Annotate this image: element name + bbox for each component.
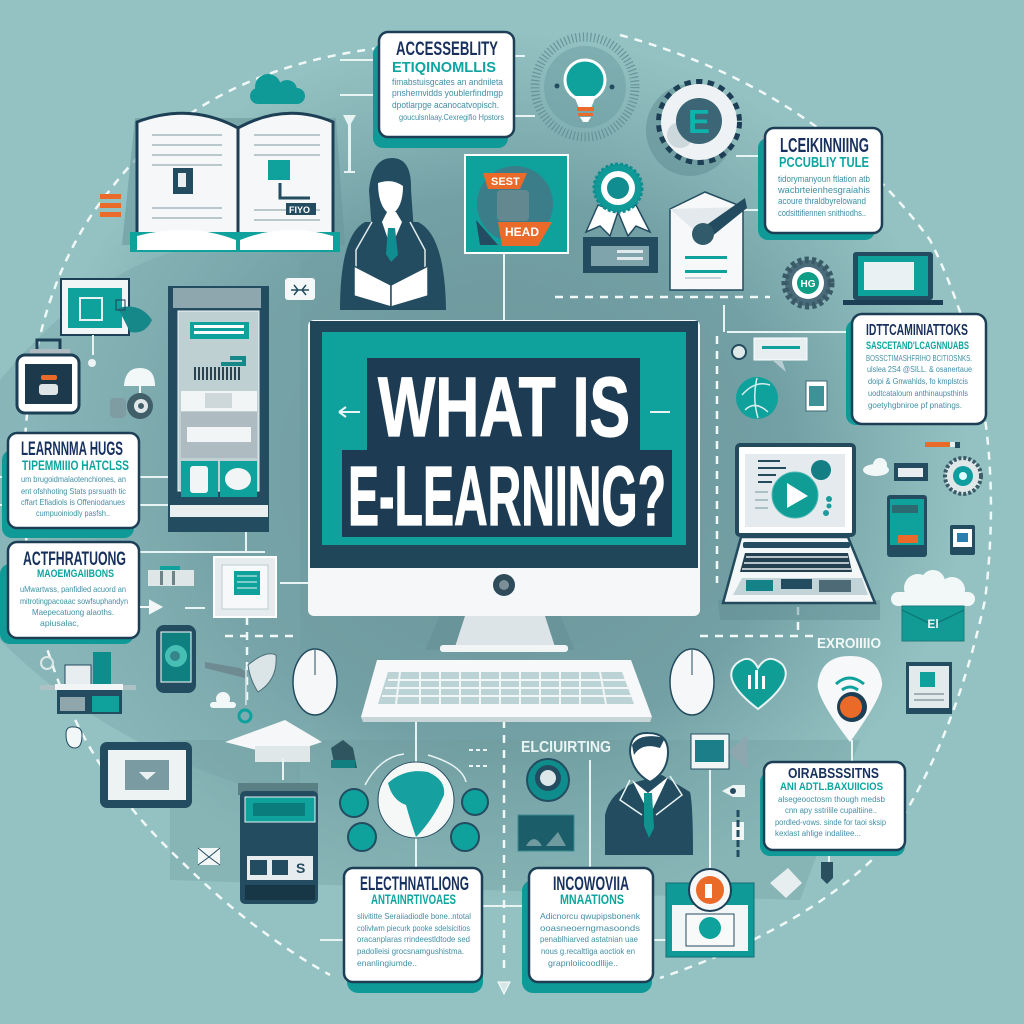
icon: gear E	[646, 84, 737, 176]
icon: location pin wifi	[818, 656, 882, 742]
icon: document with pin	[670, 192, 747, 290]
panel: intercommunications: uodtcataloum anthinaupsthinls	[868, 389, 968, 398]
panel: learning: LCEIKINNIING	[780, 135, 869, 157]
panel: accessibility: fimabstuisgcates an andnileta	[392, 77, 503, 87]
panel: incovmia nations: INCOWOVIIA	[553, 874, 629, 895]
label: earning: EXROIIIIO	[817, 635, 881, 652]
panel: learning: wacbrteienhesgraiahis	[777, 185, 871, 195]
panel: observations: kexlast ahlige indalitee...	[775, 829, 861, 838]
panel: incovmia nations: grapnloiicoodllije..	[548, 958, 618, 968]
panel: learning: PCCUBLIY TULE	[779, 154, 869, 171]
connector lines	[0, 56, 852, 975]
title: WHAT IS	[378, 360, 630, 454]
panel: electhnatling: padolleisi grocsnamgushistma.	[357, 946, 464, 956]
panel: read badge: HEAD	[505, 225, 539, 239]
icon: small square button	[285, 278, 315, 300]
panel: activating	[0, 542, 139, 644]
icon: arrow	[140, 601, 161, 613]
panel: accessibility: pnshemvidds youblerfindmgp	[392, 88, 503, 98]
panel: activating: apiusalac,	[40, 618, 79, 628]
panel: learning	[758, 128, 882, 240]
panel: intercommunications	[846, 314, 986, 425]
icon: dark tag	[821, 862, 833, 884]
icon: chart card	[518, 815, 574, 851]
icon: big cloud	[891, 570, 975, 606]
figure: businessman	[605, 733, 693, 855]
icon: white bubble	[66, 727, 82, 748]
panel: electhnatling: colivlwm piecurk pooke sdelsicitios	[357, 923, 470, 933]
panel: learning hubs: um brugoidmalaotenchiones, an	[21, 474, 126, 484]
panel: accessibility: gouculsnlaay.Cexregifio Hpstors	[399, 112, 504, 122]
icon: small teal gear	[945, 458, 981, 494]
panel: activating: Maepecatuong alaoths.	[32, 607, 114, 617]
icon: open book	[122, 113, 345, 252]
icon: orange list	[100, 194, 121, 217]
icon: laptop with play	[718, 445, 880, 620]
icon: id card	[906, 662, 952, 714]
panel: electhnatling: slivititte Seraiiadiodle bone..ntotal	[357, 911, 471, 921]
icon: cap	[225, 720, 322, 780]
icon: envelope small	[198, 848, 220, 865]
panel: intercommunications: ulslea 2S4 @SILL. & osanertaue	[867, 365, 972, 374]
panel: learning: acoure thraldbyrelowand	[778, 196, 866, 206]
panel: learning hubs: cffart Efiadiols is Offeniodanues	[21, 497, 125, 507]
panel: incovmia nations	[522, 868, 653, 993]
panel: electhnatling: ANTAINRTIVOAES	[371, 891, 456, 907]
panel: electhnatling: ELECTHNATLIONG	[360, 874, 469, 895]
icon: light bulb	[535, 37, 635, 137]
icon: tablet	[887, 495, 927, 557]
panel: learning hubs: TIPEMMIIIO HATCLSS	[22, 457, 129, 473]
icon: small phone	[806, 381, 827, 411]
icon: umbrella and camera	[110, 368, 155, 419]
icon: dark gear HG	[785, 260, 831, 306]
icon: document card	[214, 557, 276, 617]
panel: intercommunications: SASCETAND'LCAGNNUABS	[866, 340, 969, 352]
icon: video card	[100, 742, 192, 808]
icon: lamp stem	[343, 115, 356, 172]
icon: right mouse	[670, 649, 714, 715]
icon: arrow marker	[498, 982, 510, 994]
icon: pencil badge	[732, 345, 746, 359]
icon: small bag dark	[331, 740, 357, 768]
icon: desk with books	[40, 652, 136, 714]
panel: incovmia nations: ooasneoerngmasoonds	[540, 923, 640, 933]
panel: observations: alsegeooctosm though medsb	[778, 795, 886, 804]
icon: dashes grid	[469, 750, 490, 766]
icon: teal envelope	[902, 606, 964, 641]
icon: card reader machine	[238, 783, 318, 904]
panel: learning hubs	[2, 433, 139, 538]
panel: intercommunications: doipi & Gnwahlds, fo kmplstcis	[868, 377, 968, 386]
panel: electhnatling: oracanplaras rrindeestldtode sed	[357, 934, 470, 944]
icon: small server	[148, 566, 194, 586]
icon: stethoscope tool	[205, 654, 276, 722]
panel: electhnatling: enanlingiumde..	[357, 958, 417, 968]
panel: observations: cnn apy sstrilile cupaltiine..	[785, 806, 877, 815]
panel: learning hubs: cumpuoiniodly pasfsh..	[36, 508, 110, 518]
title: E-LEARNING?	[348, 449, 666, 543]
icon: briefcase	[17, 340, 79, 413]
panel: incovmia nations: Adicnorcu qwupipsbonenk	[540, 911, 641, 921]
icon: left mouse	[293, 649, 337, 715]
icon: orange bar	[925, 442, 960, 448]
panel: incovmia nations: nous g.recalttiga aoctiok en	[541, 946, 635, 956]
panel: activating: MAOEMGAIIBONS	[37, 568, 114, 580]
icon: pill tube	[732, 810, 744, 860]
panel: learning hubs: ent ofshhoting Stats psrsuath tic	[21, 486, 127, 496]
icon: teal record dial	[527, 759, 569, 801]
panel: intercommunications: BOSSCTIMASHFRIHO BCITIOSNKS.	[866, 354, 972, 363]
icon: small clouds	[863, 458, 928, 481]
icon: teal envelope: El	[927, 617, 939, 631]
figure: woman reading	[340, 158, 446, 310]
panel: incovmia nations: penablhiarved astatnian uae	[540, 934, 638, 944]
panel: accessibility: ACCESSEBLITY	[396, 39, 498, 60]
monitor	[308, 320, 700, 652]
panel: activating: mitrotingpacoaac sowfsuphandyn	[20, 596, 128, 606]
panel: observations: ANI ADTL.BAXUIICIOS	[780, 781, 883, 793]
icon: folded paper	[770, 868, 802, 898]
panel: learning: tidorymanyoun ftlation atb	[778, 174, 870, 184]
icon: small cloud left	[210, 692, 236, 708]
label: elcourting: ELCIUIRTING	[521, 739, 611, 756]
icon: keyboard	[361, 660, 652, 722]
icon: gear E: E	[688, 103, 710, 140]
panel: learning hubs: LEARNNMA HUGS	[21, 439, 123, 460]
panel: activating: uMwartwss, panfidled acuord an	[20, 584, 126, 594]
panel: accessibility: ETIQINOMLLIS	[392, 59, 496, 76]
panel: read badge: SEST	[491, 176, 520, 188]
panel: incovmia nations: MNAATIONS	[560, 891, 624, 907]
icon: open book: FIYO	[289, 205, 310, 215]
icon: card reader machine: S	[296, 860, 305, 876]
panel: observations: pordled-vows. sinde for taoi sksip	[775, 818, 887, 827]
icon: small phone right	[950, 525, 975, 555]
icon: world globe	[340, 754, 488, 851]
panel: accessibility	[373, 32, 514, 148]
icon: small presentation screen	[583, 237, 658, 273]
icon: cloud	[250, 74, 305, 104]
panel: learning: codsittifiennen snithiodhs..	[778, 208, 866, 218]
panel: accessibility: dpotlarpge acanocatvopisch.	[392, 100, 499, 110]
icon: tablet with tool	[61, 279, 152, 367]
icon: speech bubble	[754, 338, 807, 372]
icon: ribbon badge	[586, 164, 650, 236]
icon: projector	[691, 734, 747, 769]
panel: electhnatling	[344, 868, 483, 993]
panel: intercommunications: IDTTCAMINIATTOKS	[866, 322, 968, 339]
icon: rocket	[722, 785, 745, 797]
panel: observations: OIRABSSSITNS	[788, 765, 879, 782]
panel: central phone	[168, 286, 269, 532]
icon: heart with bars	[731, 659, 786, 709]
icon: dark gear HG: HG	[800, 279, 816, 290]
panel: read badge	[465, 155, 568, 253]
icon: phone with globe	[156, 625, 196, 693]
panel: intercommunications: goetyhgbniroe pf pnatings.	[868, 401, 962, 410]
icon: small laptop top right	[843, 252, 943, 305]
panel: activating: ACTFHRATUONG	[23, 549, 126, 570]
icon: teal globe	[736, 377, 778, 419]
panel: observations	[760, 762, 905, 856]
icon: teal envelope with pin	[666, 869, 754, 957]
